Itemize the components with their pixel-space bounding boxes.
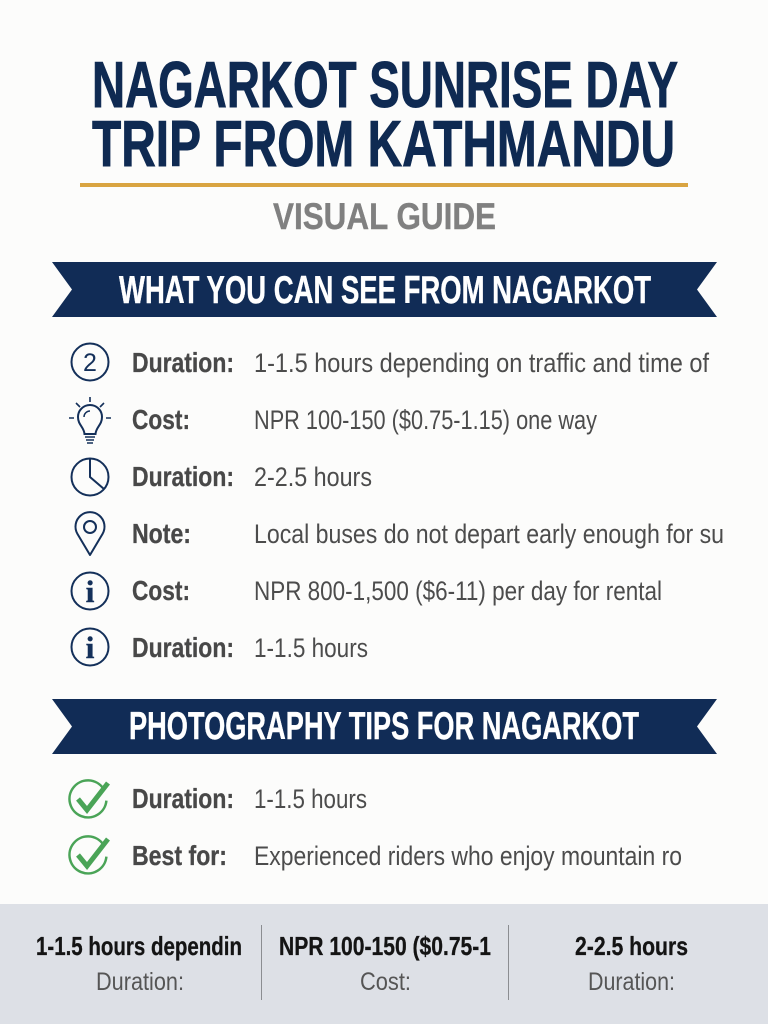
stat: duration: 1-1.5 hours dependin: [36, 931, 242, 961]
row: best for: Best for:: [132, 840, 227, 871]
title: [92, 48, 678, 180]
row: cost rental: Cost:: [132, 575, 190, 606]
stat: cost: [279, 931, 491, 996]
row: note: Note:: [132, 518, 191, 549]
row: cost rental: [72, 572, 662, 610]
stat: duration 2: 2-2.5 hours: [575, 931, 688, 961]
row: note: [76, 512, 724, 555]
row: duration 1-1.5 hours: Duration:: [132, 632, 234, 663]
stat: cost: NPR 100-150 ($0.75-1: [279, 931, 491, 961]
icon: green check: [69, 780, 108, 817]
row: cost one way: Cost:: [132, 404, 190, 435]
row: cost one way: [69, 397, 597, 443]
stat: duration: [36, 931, 242, 996]
row: cost rental: NPR 800-1,500 ($6-11) per day for rental: [254, 576, 662, 606]
subtitle: VISUAL GUIDE: [273, 196, 496, 237]
row: duration traffic: [72, 344, 709, 380]
stat: duration 2: Duration:: [588, 968, 675, 996]
icon: clock: [72, 458, 108, 496]
row: duration: 1-1.5 hours: [254, 784, 367, 814]
row: duration 2-2.5 hours: 2-2.5 hours: [254, 462, 372, 492]
row: duration 1-1.5 hours: 1-1.5 hours: [254, 633, 368, 663]
row: best for: [69, 836, 682, 873]
icon: light bulb: [69, 397, 111, 443]
stat: duration 2: [575, 931, 688, 996]
stat: cost: Cost:: [360, 968, 411, 996]
icon: info: i: [86, 630, 95, 665]
icon: info: [72, 572, 108, 610]
icon: green check: [69, 836, 108, 873]
icon: map pin: [76, 512, 104, 555]
row: duration: [69, 780, 367, 817]
row: best for: Experienced riders who enjoy mountain ro: [254, 841, 682, 871]
row: cost one way: NPR 100-150 ($0.75-1.15) one way: [254, 405, 597, 435]
row: duration traffic: 1-1.5 hours depending on traffic and time of: [254, 348, 709, 378]
panel: summary footer: [0, 904, 768, 1024]
row: duration 2-2.5 hours: Duration:: [132, 461, 234, 492]
row: duration 1-1.5 hours: [72, 628, 368, 666]
stat: duration: Duration:: [96, 968, 184, 996]
panel: what you can see list: [69, 344, 724, 666]
icon: number 2: 2: [83, 349, 97, 377]
gold title rule: [80, 183, 688, 187]
banner: what you can see: [52, 262, 717, 317]
icon: number 2: [72, 344, 108, 380]
row: duration traffic: Duration:: [132, 347, 234, 378]
row: duration: Duration:: [132, 783, 234, 814]
icon: info: i: [86, 574, 95, 609]
icon: info: [72, 628, 108, 666]
row: duration 2-2.5 hours: [72, 458, 372, 496]
banner: photography tips: [52, 699, 717, 754]
panel: photography tips list: [69, 780, 682, 873]
